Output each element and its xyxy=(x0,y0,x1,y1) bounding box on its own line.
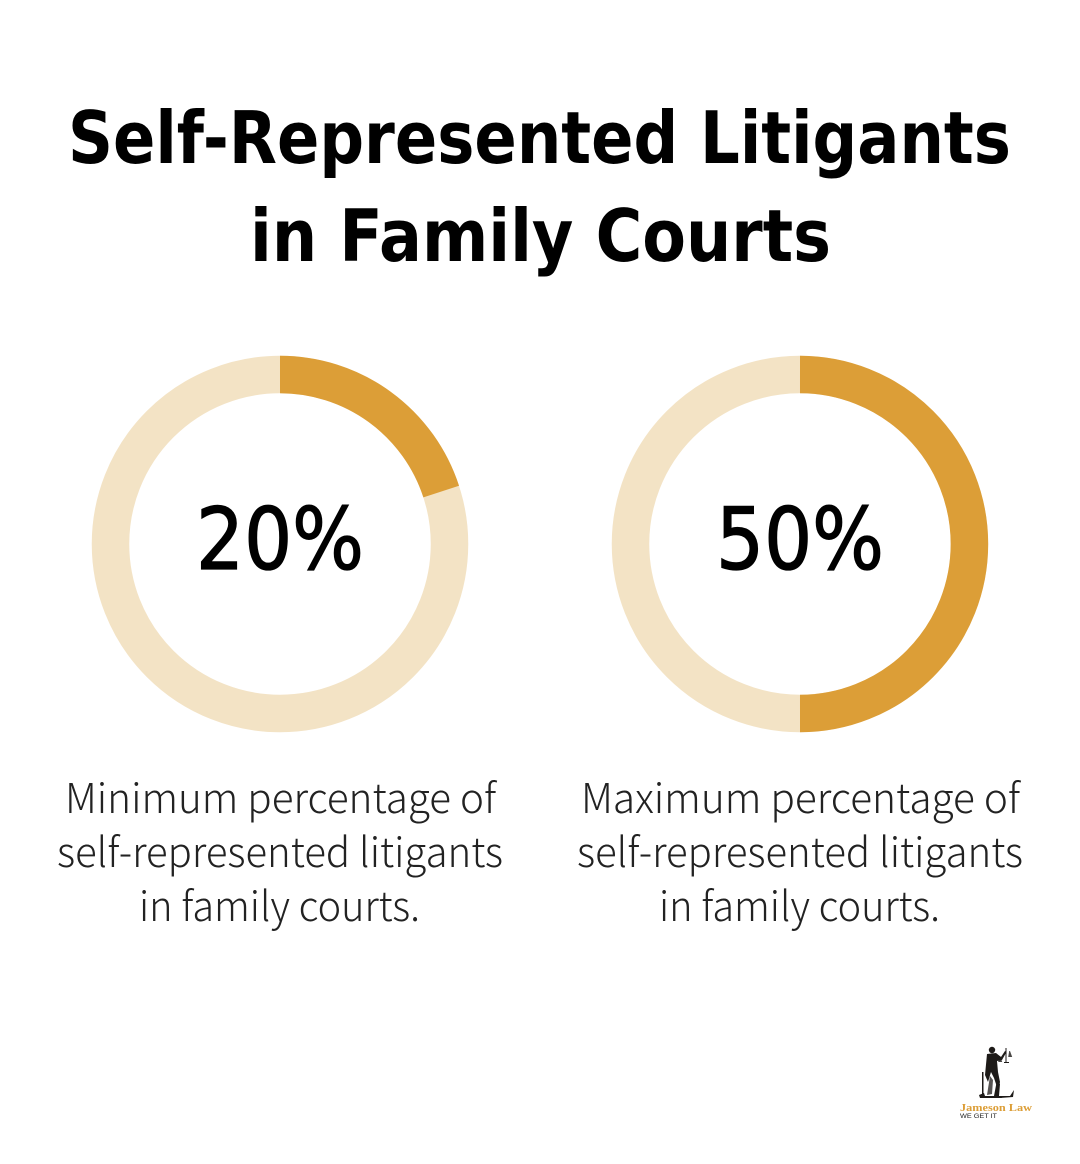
description: maximum: Maximum percentage of xyxy=(581,765,1022,825)
logo name: Jameson Law xyxy=(960,1103,1032,1114)
description: minimum: in family courts. xyxy=(139,873,420,933)
title xyxy=(68,96,1011,278)
panel: maximum percentage xyxy=(577,374,1023,933)
logo: Jameson Law xyxy=(960,1047,1032,1120)
description: maximum xyxy=(577,765,1023,933)
donut chart: 50% xyxy=(630,374,970,714)
title: in Family Courts xyxy=(250,194,831,278)
description: minimum: self-represented litigants xyxy=(57,819,503,879)
logo tagline: WE GET IT xyxy=(960,1113,997,1120)
value: 50%: 50% xyxy=(716,490,884,590)
description: maximum: self-represented litigants xyxy=(577,819,1023,879)
panel: minimum percentage xyxy=(57,374,503,933)
description: minimum xyxy=(57,765,503,933)
donut chart: 20% xyxy=(110,374,450,714)
value: 20%: 20% xyxy=(196,490,364,590)
description: minimum: Minimum percentage of xyxy=(65,765,498,825)
icon: lady justice xyxy=(979,1047,1014,1098)
description: maximum: in family courts. xyxy=(659,873,940,933)
